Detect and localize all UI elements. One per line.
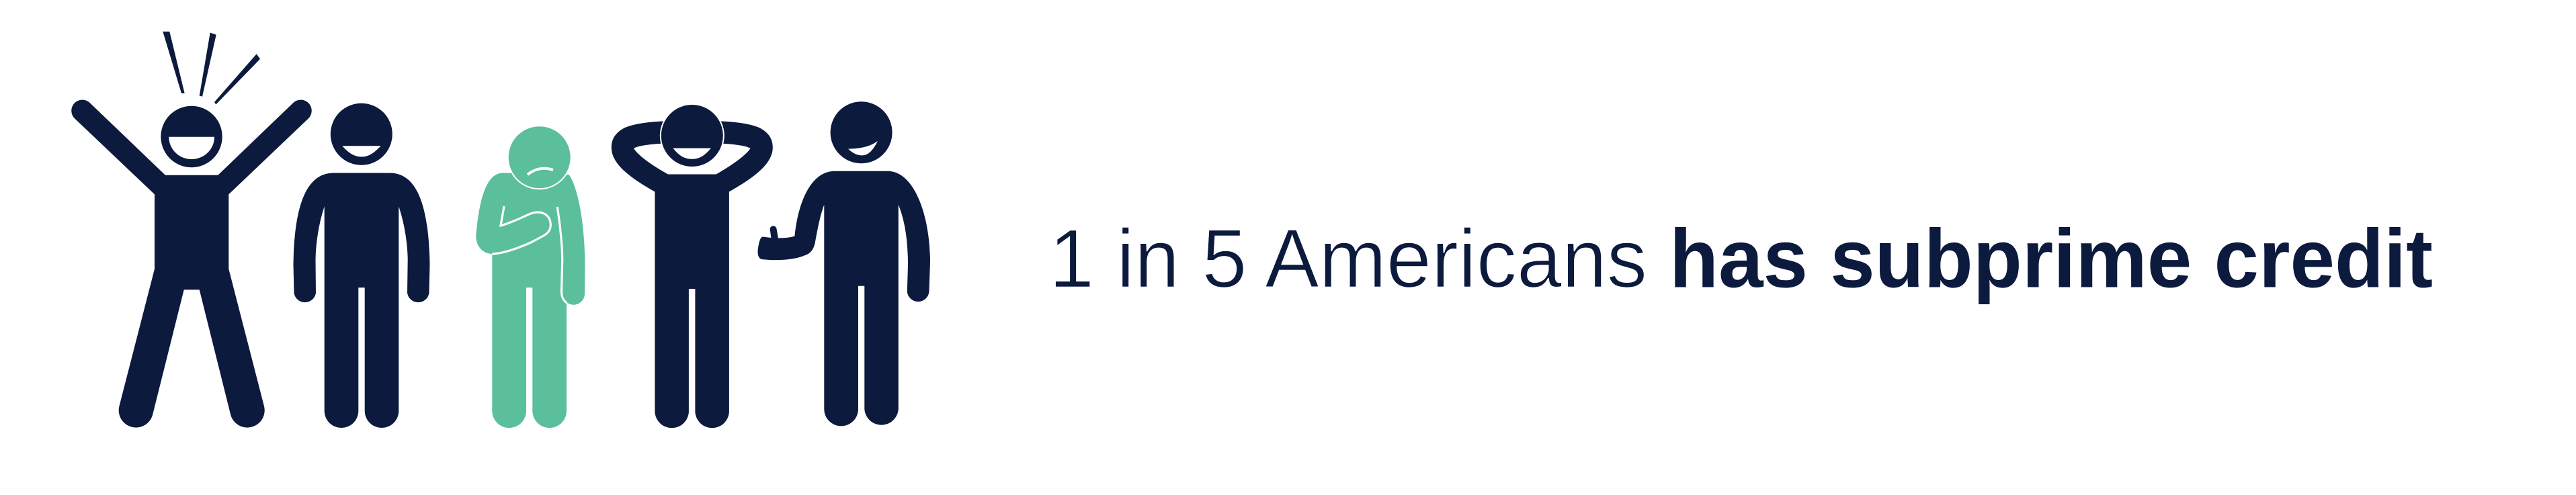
body and arms: relaxed person [612, 121, 773, 428]
body: sad person [476, 173, 585, 428]
icon: person giving thumbs up [758, 101, 930, 426]
head: relaxed person [661, 105, 723, 167]
frown: sad person [528, 169, 553, 175]
icon: excitement rays [163, 32, 260, 105]
headline text [1049, 214, 2433, 306]
headline: light part: 1 in 5 Americans [1049, 214, 1647, 306]
crossed arm outline: sad person [492, 206, 550, 254]
head: excited person [161, 106, 222, 167]
mouth: thumbs up person [848, 141, 878, 155]
body: excited person [71, 100, 312, 428]
icon: smiling standing person [293, 103, 430, 428]
icon: excited person with raised arms [71, 32, 312, 428]
body: thumbs up person [758, 171, 930, 426]
body: smiling person [293, 173, 430, 428]
head: sad person [509, 126, 571, 188]
mouth: smiling person [342, 146, 381, 156]
arm outline: sad person [557, 207, 567, 303]
icon: relaxed person with hands behind head [612, 105, 773, 428]
head: smiling person [331, 103, 392, 165]
headline: bold part: has subprime credit [1669, 214, 2433, 306]
mouth: relaxed person [673, 148, 711, 159]
mouth: excited person [169, 137, 214, 159]
head: thumbs up person [831, 101, 892, 163]
icon: sad green person with subprime credit [476, 126, 585, 428]
